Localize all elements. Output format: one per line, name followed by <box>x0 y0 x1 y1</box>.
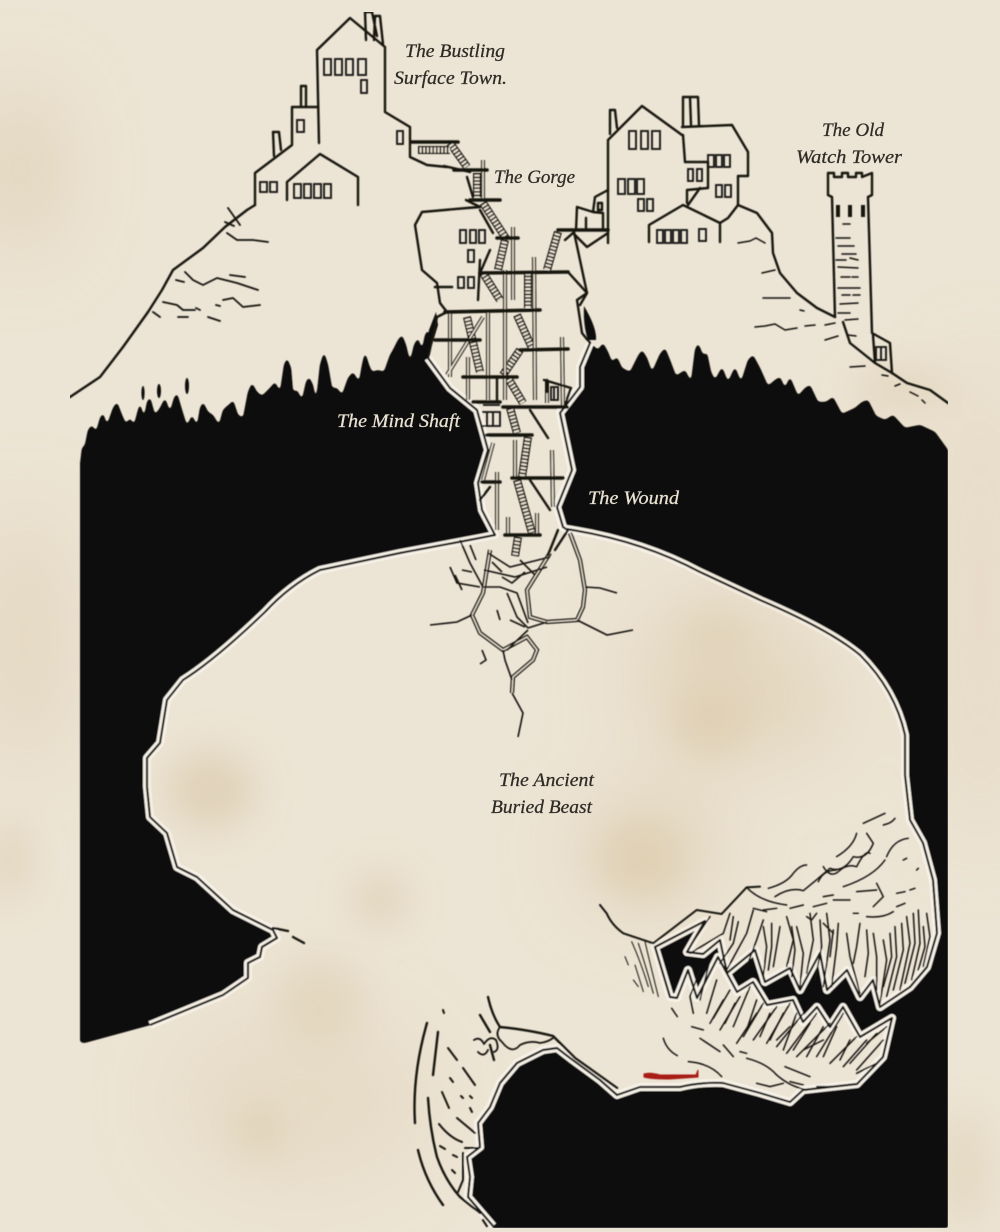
label: the old watch tower: Watch Tower <box>796 147 903 168</box>
watch tower <box>828 173 892 373</box>
mid gorge house <box>415 200 493 358</box>
neck and fin lines <box>414 997 617 1226</box>
gorge edge slivers <box>426 306 596 350</box>
black underground: left mass <box>80 330 495 1043</box>
label: the old watch tower <box>796 120 903 168</box>
gorge right wall and edge <box>565 190 608 343</box>
beast outline: white halo and ink line <box>147 343 937 1226</box>
red mark <box>644 1070 698 1079</box>
label: the ancient buried beast: Buried Beast <box>491 797 593 818</box>
floating tree specks <box>141 378 189 400</box>
label: the bustling surface town: Surface Town. <box>394 68 507 89</box>
label: the old watch tower: The Old <box>822 120 885 141</box>
label: the mind shaft: The Mind Shaft <box>337 411 461 432</box>
label: the bustling surface town <box>394 41 507 89</box>
label: the wound: The Wound <box>588 488 680 509</box>
black underground: right mass with mouth <box>467 343 948 1228</box>
roots <box>430 530 633 737</box>
surface town: right buildings <box>608 97 748 243</box>
right hill <box>738 205 948 403</box>
label: the ancient buried beast: The Ancient <box>499 770 595 791</box>
label: the bustling surface town: The Bustling <box>405 41 505 62</box>
left hill <box>70 205 268 397</box>
label: the ancient buried beast <box>491 770 595 818</box>
surface town: left buildings <box>255 12 447 205</box>
label: the gorge: The Gorge <box>494 167 575 188</box>
gorge scaffolding and stairs <box>411 142 608 556</box>
beast jaw line work <box>600 813 930 1090</box>
